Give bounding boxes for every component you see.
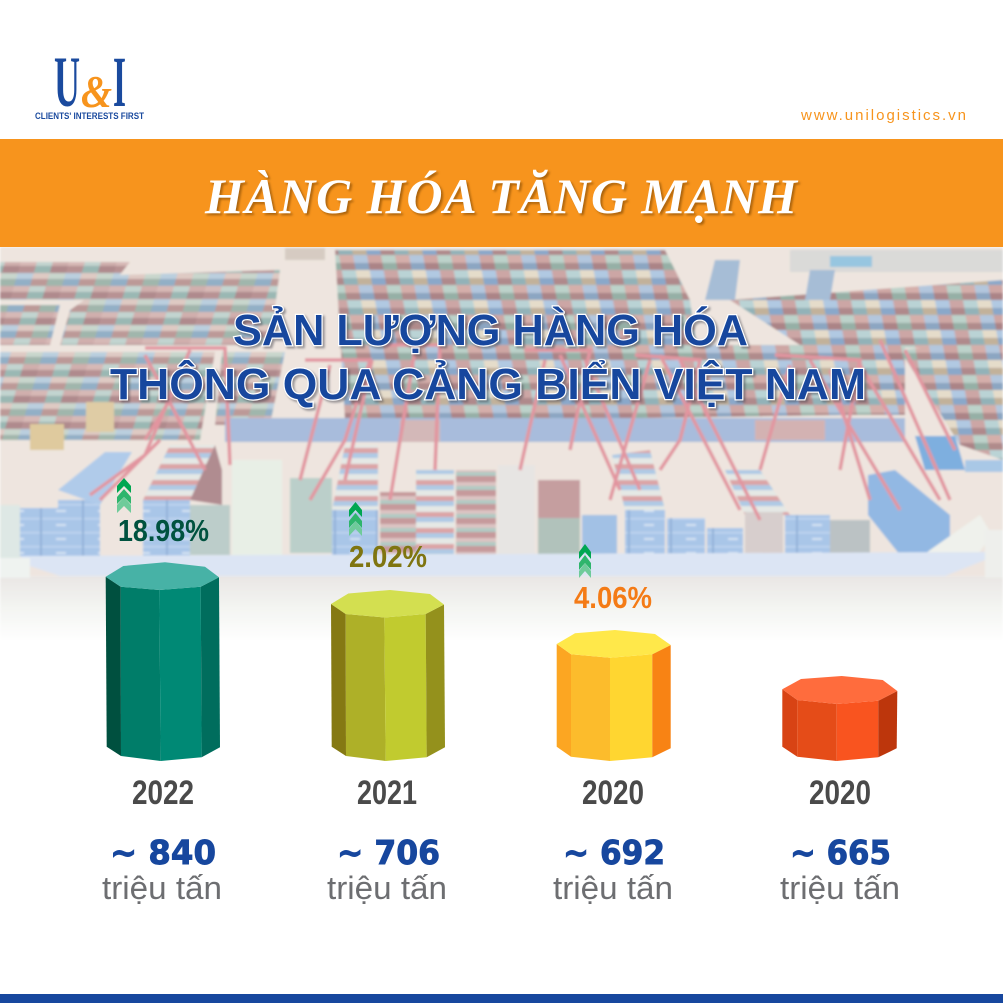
chart heading [110,305,866,409]
column 2020 (665) labels: 2020 [809,774,871,812]
cranes [90,340,955,520]
growth label 2022: 18.98% [118,513,209,548]
growth label 2021: 2.02% [349,539,427,574]
banner title: HÀNG HÓA TĂNG MẠNH [204,168,799,224]
column 2020 (692) labels [553,774,673,906]
column 2020 (692) labels: triệu tấn [553,870,673,906]
column 2021 labels [327,774,447,906]
white fade [0,576,1003,642]
growth label 2022 [117,478,209,548]
column 2020 (692) labels: 2020 [582,774,644,812]
chart heading: SẢN LƯỢNG HÀNG HÓA [233,305,748,355]
column 2020 (665) labels [780,774,900,906]
column 2022 labels: 2022 [132,774,194,812]
bottom blue bar [0,994,1003,1003]
column 2022 labels: ~ 840 [110,833,216,872]
logo: U&I: I [113,42,126,122]
quay row of blue containers [225,418,1003,472]
ship container stacks [0,445,992,560]
website url: www.unilogistics.vn [800,107,966,124]
bar 2022 [106,562,220,761]
bar 2020 (665) [782,676,897,761]
column 2021 labels: ~ 706 [337,833,440,872]
bar 2021 [331,590,445,761]
growth label 2020 [574,544,652,615]
logo: U&I: & [81,66,112,117]
logo: U&I: CLIENTS' INTERESTS FIRST [35,111,144,121]
growth label 2021 [349,502,427,574]
column 2021 labels: 2021 [357,774,417,812]
ship hull [20,535,992,578]
container yard [0,248,1003,460]
column 2020 (665) labels: triệu tấn [780,870,900,906]
logo: U&I [35,42,144,122]
orange banner [0,139,1003,247]
column 2020 (665) labels: ~ 665 [790,833,891,872]
growth label 2020: 4.06% [574,580,652,615]
background photo: container port [0,247,1003,642]
chart heading: THÔNG QUA CẢNG BIỂN VIỆT NAM [110,358,866,409]
column 2022 labels: triệu tấn [102,870,222,906]
translucent wash over photo [0,247,1003,577]
column 2021 labels: triệu tấn [327,870,447,906]
bar 2020 (692) [557,630,671,761]
column 2020 (692) labels: ~ 692 [563,833,665,872]
column 2022 labels [102,774,222,906]
logo: U&I: U [54,42,80,122]
